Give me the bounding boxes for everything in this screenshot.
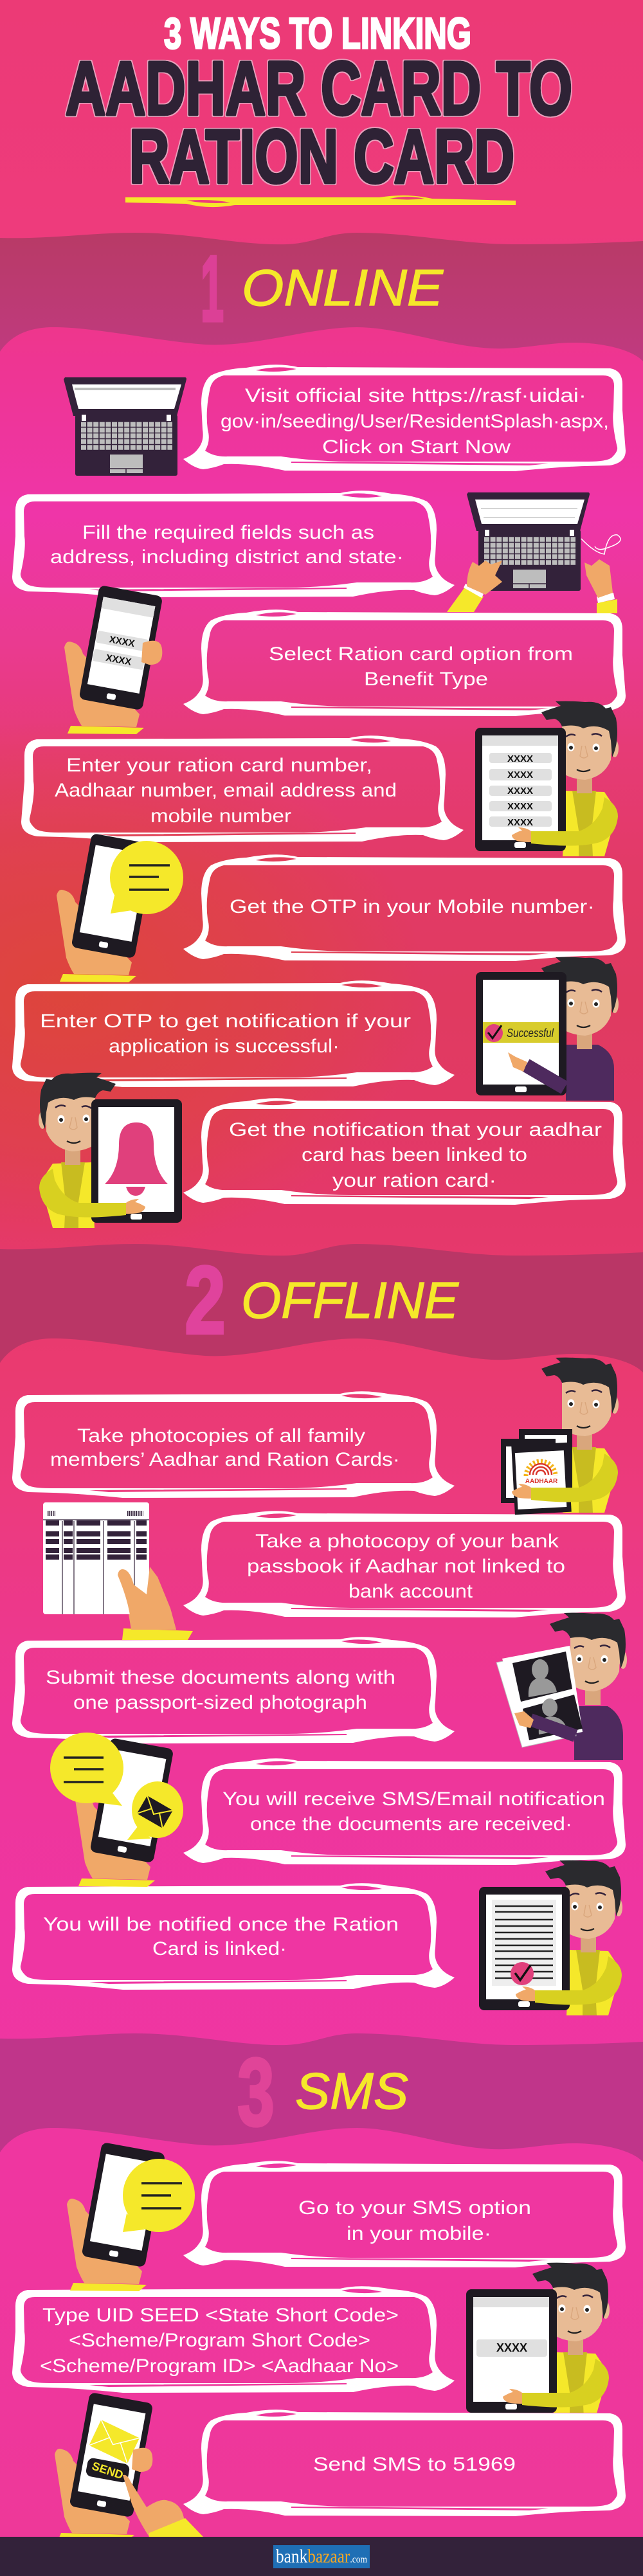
icon: hand holding phone with two fields: XXXX: [105, 653, 132, 668]
bubble: type UID SEED: <Scheme/Program ID> <Aadhaar No>: [40, 2355, 399, 2377]
bubble: enter ration card number: [21, 735, 464, 842]
section heading offline: OFFLINE: [241, 1272, 460, 1329]
icon: man holding Aadhaar photocopies: [501, 1358, 619, 1515]
section band: sms: [0, 2033, 643, 2162]
section number 3: 3: [237, 2038, 275, 2146]
icon: hand pressing send on phone: SEND: [91, 2460, 125, 2481]
icon: man with tablet document: [479, 1860, 622, 2015]
bubble: go to sms option: in your mobile·: [347, 2223, 491, 2244]
bubble: take photocopies: [12, 1391, 455, 1498]
bubble: visit official site: gov·in/seeding/User/ResidentSplash·aspx,: [221, 411, 609, 432]
icon: passbook with hand: [43, 1502, 193, 1640]
bubble: notified when linked: You will be notified once the Ration: [43, 1914, 399, 1935]
bubble: bank passbook: [183, 1511, 626, 1617]
bubble: type UID SEED: <Scheme/Program Short Code>: [69, 2330, 370, 2351]
icon: man with tablet form: XXXX: [507, 801, 533, 812]
icon: hand holding phone with message bubble: [57, 833, 183, 982]
icon: man with tablet form: XXXX: [507, 770, 533, 780]
bubble: fill required fields: Fill the required fields such as: [82, 522, 374, 543]
section heading sms: SMS: [295, 2062, 408, 2120]
title line: Ration card: RATION CARD: [129, 114, 514, 199]
bubble: get the OTP: [183, 854, 626, 961]
bubble: get the notification: card has been linked to: [302, 1144, 527, 1166]
bubble: enter ration card number: Aadhaar number, email address and: [55, 780, 397, 801]
envelope: [89, 2420, 140, 2463]
icon: man with tablet XXXX field: XXXX: [496, 2341, 527, 2354]
bubble: go to sms option: Go to your SMS option: [298, 2197, 531, 2219]
section heading online: ONLINE: [242, 259, 444, 316]
icon: hand pressing send on phone: [55, 2392, 203, 2541]
bubble: select ration card option: [183, 609, 626, 716]
bubble: submit documents: Submit these documents along with: [46, 1667, 395, 1688]
section band: online: 1: [201, 237, 224, 341]
bubble: select ration card option: Select Ration card option from: [269, 644, 573, 665]
icon: hand holding phone with two fields: XXXX: [108, 634, 136, 649]
icon: hand holding phone with message and envelope bubbles: [50, 1733, 183, 1887]
section band: online: [0, 233, 643, 361]
bubble: receive notification: [183, 1758, 626, 1865]
footer bar: [0, 2537, 643, 2576]
bubble: send sms: [183, 2409, 626, 2516]
bubble: enter ration card number: mobile number: [150, 806, 291, 827]
aadhaar logo: AADHAAR: [525, 1478, 558, 1485]
icon: man with tablet form: XXXX: [507, 817, 533, 828]
bubble: go to sms option: [183, 2161, 626, 2267]
bubble: visit official site: Click on Start Now: [322, 437, 511, 458]
bubble: bank passbook: Take a photocopy of your bank: [255, 1531, 559, 1552]
bubble: get the OTP: Get the OTP in your Mobile number·: [230, 896, 595, 917]
title underline: [125, 195, 516, 207]
bubble: get the notification: your ration card·: [332, 1170, 496, 1191]
bubble: notified when linked: [12, 1883, 455, 1990]
bubble: take photocopies: Take photocopies of all family: [77, 1425, 365, 1446]
bubble: submit documents: one passport-sized photograph: [73, 1692, 367, 1713]
bubble: send sms: Send SMS to 51969: [313, 2454, 516, 2475]
bubble: notified when linked: Card is linked·: [152, 1938, 287, 1959]
icon: man with tablet form: [475, 701, 619, 856]
bubble: take photocopies: members’ Aadhar and Ration Cards·: [50, 1449, 400, 1470]
icon: man with tablet showing notification bell: [39, 1073, 182, 1228]
bubble: visit official site: [183, 365, 626, 471]
title line: 3 ways to linking: 3 WAYS TO LINKING: [164, 9, 471, 58]
title: [66, 9, 572, 207]
bubble: receive notification: once the documents are received·: [250, 1814, 572, 1835]
icon: laptop: [64, 377, 186, 476]
bubble: enter ration card number: Enter your ration card number,: [66, 755, 372, 776]
section band: offline: [0, 1244, 643, 1373]
bubble: enter OTP: Enter OTP to get notification if your: [40, 1011, 411, 1032]
bubble: get the notification: [183, 1098, 626, 1205]
bubble: fill required fields: [12, 491, 455, 597]
icon: hand holding phone with message bubble (sms): [67, 2142, 195, 2291]
bubble: enter OTP: [12, 980, 455, 1087]
icon: man with tablet form: XXXX: [507, 753, 533, 764]
icon: man with tablet form: XXXX: [507, 786, 533, 797]
bubble: fill required fields: address, including district and state·: [50, 546, 404, 568]
bubble: select ration card option: Benefit Type: [364, 669, 488, 690]
bubble: type UID SEED: Type UID SEED <State Short Code>: [42, 2305, 399, 2326]
bubble: receive notification: You will receive SMS/Email notification: [222, 1788, 605, 1810]
bubble: get the notification: Get the notification that your aadhar: [229, 1119, 602, 1140]
bubble: type UID SEED: [12, 2286, 455, 2393]
icon: man with tablet showing successful: Successful: [507, 1027, 554, 1040]
bubble: bank passbook: bank account: [349, 1581, 473, 1602]
section number 2: 2: [185, 1246, 226, 1354]
icon: man holding passport photos: [496, 1613, 627, 1760]
icon: man with tablet showing successful: [476, 957, 619, 1101]
icon: man with tablet XXXX field: [466, 2263, 610, 2418]
icon: hands typing on laptop: [447, 492, 620, 613]
bubble: bank passbook: passbook if Aadhar not linked to: [247, 1556, 565, 1577]
bubble: visit official site: Visit official site https://rasf·uidai·: [245, 385, 586, 406]
icon: hand holding phone with two fields: [64, 585, 163, 734]
bubble: enter OTP: application is successful·: [109, 1036, 340, 1057]
bubble: submit documents: [12, 1637, 455, 1743]
bankbazaar logo: bankbazaar.com: [276, 2546, 367, 2567]
